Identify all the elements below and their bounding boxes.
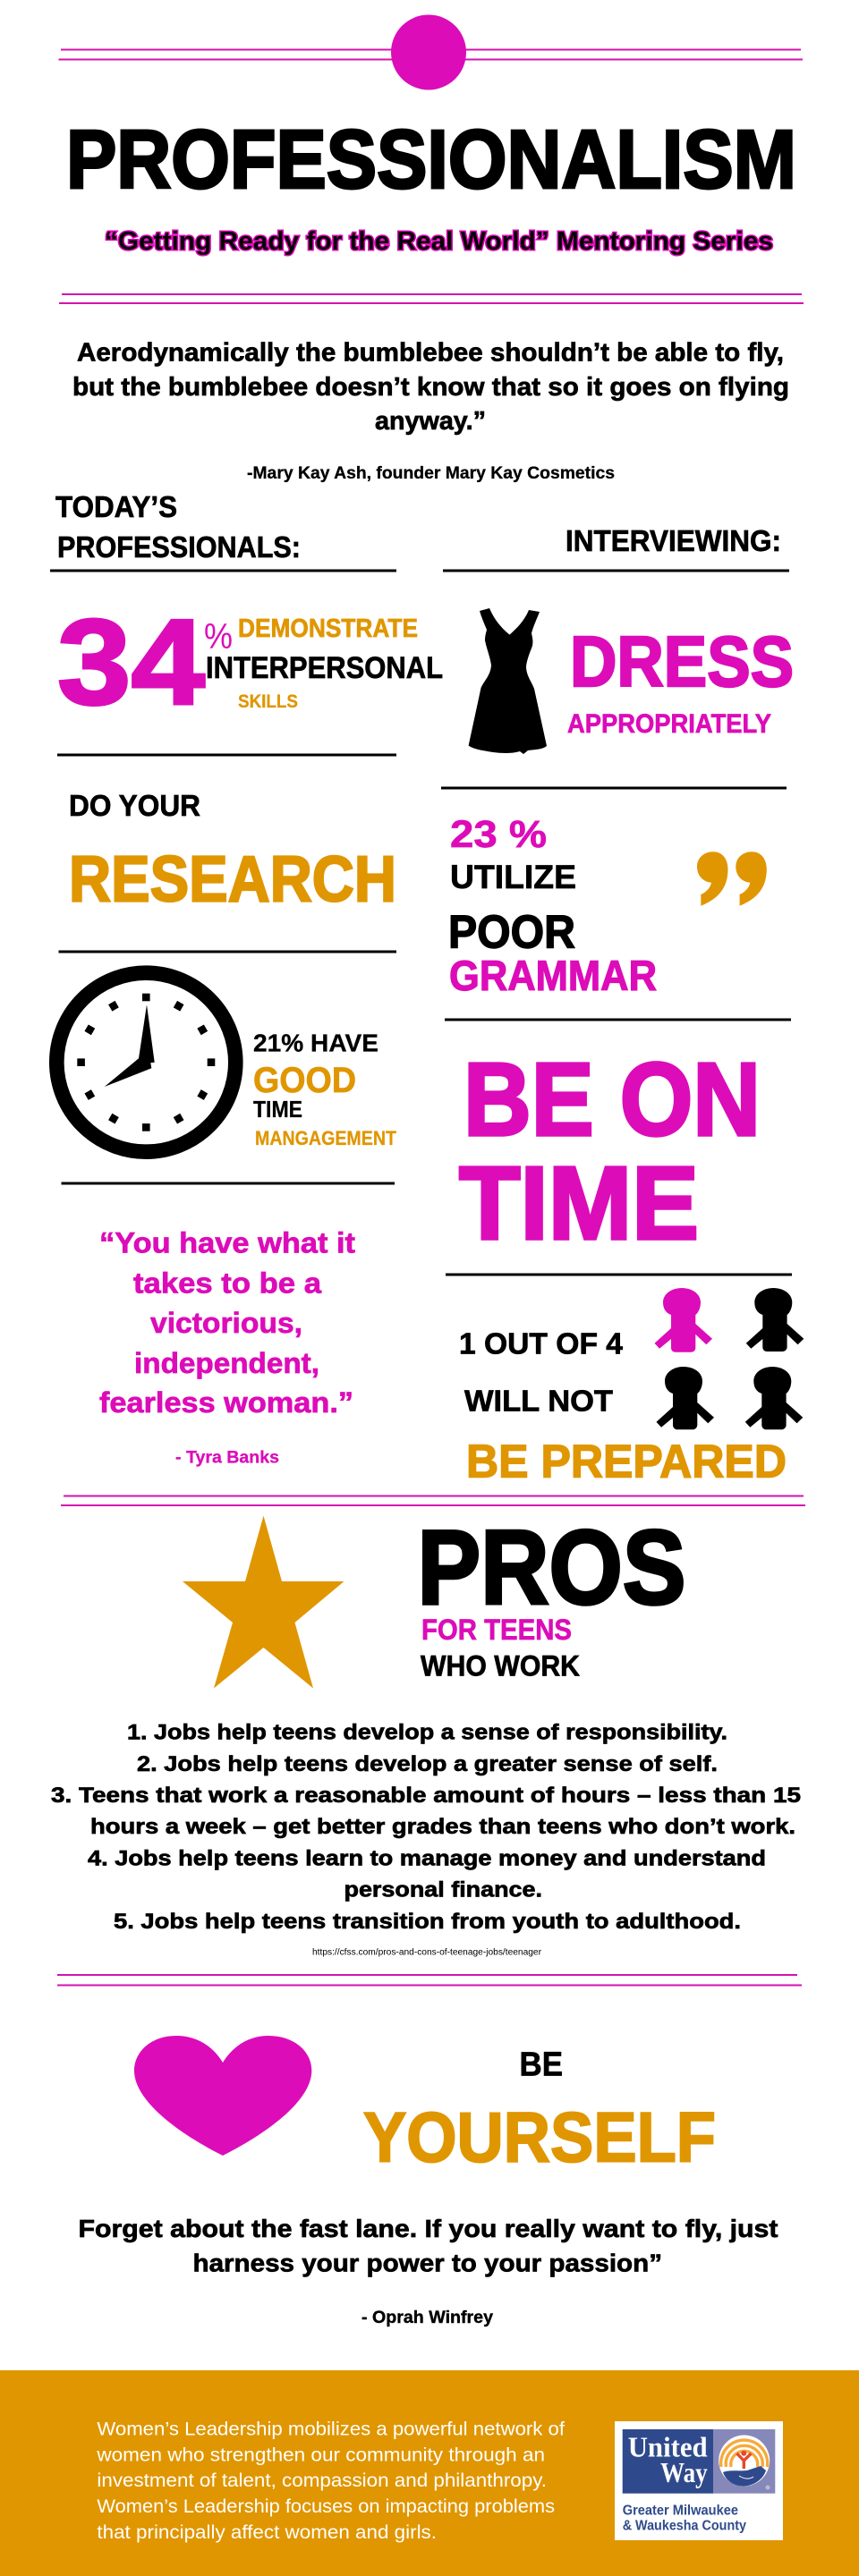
heading line 1: TODAY’S [55, 491, 177, 524]
logo emblem [719, 2435, 770, 2490]
logo word: Way: Way [660, 2456, 708, 2488]
panel: 21 percent good time management [56, 973, 396, 1152]
subtitle: “Getting Ready for the Real World” Mentoring Series [105, 227, 773, 256]
panel: 34 percent interpersonal skills [57, 594, 443, 730]
time: TIME [253, 1097, 302, 1123]
title: PROFESSIONALISM [66, 113, 796, 206]
be prepared: BE PREPARED [466, 1435, 787, 1487]
icon: quotation mark [697, 852, 767, 906]
quote line 1: “You have what it [99, 1227, 355, 1259]
footer line 4: Women’s Leadership focuses on impacting problems [97, 2496, 555, 2517]
icon: star [183, 1516, 344, 1689]
quote line 3: anyway.” [375, 407, 486, 436]
appropriately: APPROPRIATELY [567, 709, 771, 739]
utilize: UTILIZE [450, 858, 576, 895]
icon: black person bottom right [745, 1367, 803, 1429]
heading: today's professionals [55, 491, 301, 564]
who work: WHO WORK [421, 1650, 580, 1682]
panel: dress appropriately [469, 608, 794, 754]
interpersonal: INTERPERSONAL [206, 651, 443, 685]
pros: PROS [417, 1509, 685, 1627]
panel: be on time [459, 1041, 761, 1261]
item 1: 1. Jobs help teens develop a sense of responsibility. [127, 1721, 727, 1745]
logo word: United: United [628, 2431, 708, 2463]
panel: do your research [69, 790, 396, 916]
footer line 1: Women’s Leadership mobilizes a powerful network of [97, 2419, 565, 2440]
logo text: Waukesha County: & Waukesha County [623, 2519, 746, 2533]
item 4 line 2: personal finance. [344, 1878, 542, 1902]
time: TIME [459, 1145, 699, 1261]
item 3 line 1: 3. Teens that work a reasonable amount of hours – less than 15 [51, 1784, 801, 1808]
poor: POOR [448, 907, 575, 959]
heading: interviewing: INTERVIEWING: [566, 525, 781, 558]
quote line 1: Aerodynamically the bumblebee shouldn’t be able to fly, [77, 338, 784, 367]
footer line 3: investment of talent, compassion and philanthropy. [97, 2470, 547, 2491]
percent sign: % [204, 617, 233, 657]
23 percent: 23 % [450, 813, 547, 856]
quote attribution: -Mary Kay Ash, founder Mary Kay Cosmetics [247, 463, 615, 483]
footer line 5: that principally affect women and girls. [97, 2521, 437, 2543]
footer panel [0, 2370, 859, 2576]
icon: black person top right [746, 1288, 804, 1352]
item 2: 2. Jobs help teens develop a greater sense of self. [137, 1752, 718, 1776]
good: GOOD [253, 1061, 356, 1100]
footer text [96, 2419, 565, 2543]
oprah quote line 1: Forget about the fast lane. If you really want to fly, just [79, 2215, 778, 2242]
logo: United Way [615, 2421, 783, 2540]
for teens: FOR TEENS [421, 1614, 572, 1646]
item 4 line 1: 4. Jobs help teens learn to manage money and understand [88, 1847, 766, 1871]
be: BE [519, 2046, 563, 2084]
yourself: YOURSELF [363, 2097, 716, 2177]
quote line 2: but the bumblebee doesn’t know that so it goes on flying [72, 373, 789, 402]
panel: pros for teens who work [51, 1509, 801, 1958]
panel: 23 percent poor grammar [448, 813, 767, 999]
quote line 5: fearless woman.” [99, 1386, 353, 1419]
item 5: 5. Jobs help teens transition from youth to adulthood. [114, 1910, 741, 1934]
dress word: DRESS [570, 622, 794, 701]
21 percent have: 21% HAVE [253, 1030, 378, 1057]
quote line 2: takes to be a [133, 1267, 321, 1299]
icon: black person bottom left [657, 1367, 714, 1429]
be on: BE ON [464, 1041, 761, 1157]
attribution: - Tyra Banks [175, 1448, 279, 1468]
quote line 3: victorious, [150, 1307, 302, 1339]
will not: WILL NOT [464, 1385, 614, 1419]
mangagement: MANGAGEMENT [255, 1127, 396, 1149]
list of pros [51, 1721, 801, 1934]
item 3 line 2: hours a week – get better grades than teens who don’t work. [90, 1815, 795, 1839]
icon: dress [469, 608, 547, 754]
skills: SKILLS [238, 691, 298, 712]
footer line 2: women who strengthen our community through an [96, 2445, 545, 2466]
icon: pink person [655, 1288, 712, 1352]
big number 34: 34 [57, 594, 205, 730]
oprah quote line 2: harness your power to your passion” [193, 2249, 662, 2277]
panel: 1 out of 4 be prepared [459, 1288, 804, 1487]
heading line 2: PROFESSIONALS: [57, 531, 301, 564]
icon: heart [134, 2036, 311, 2156]
header circle [391, 14, 466, 89]
quote line 4: independent, [134, 1347, 319, 1379]
source url: https://cfss.com/pros-and-cons-of-teenage-jobs/teenager [312, 1948, 542, 1958]
icon: clock [56, 973, 235, 1152]
research: RESEARCH [69, 844, 396, 916]
opening quote [72, 338, 789, 436]
attribution: - Oprah Winfrey [361, 2308, 493, 2327]
panel: be yourself [79, 2036, 778, 2327]
do your: DO YOUR [69, 790, 200, 823]
demonstrate: DEMONSTRATE [238, 614, 418, 643]
logo text: Greater Milwaukee: Greater Milwaukee [623, 2504, 738, 2519]
grammar: GRAMMAR [449, 952, 657, 999]
panel: tyra banks quote [99, 1227, 355, 1468]
1 out of 4: 1 OUT OF 4 [459, 1328, 623, 1361]
